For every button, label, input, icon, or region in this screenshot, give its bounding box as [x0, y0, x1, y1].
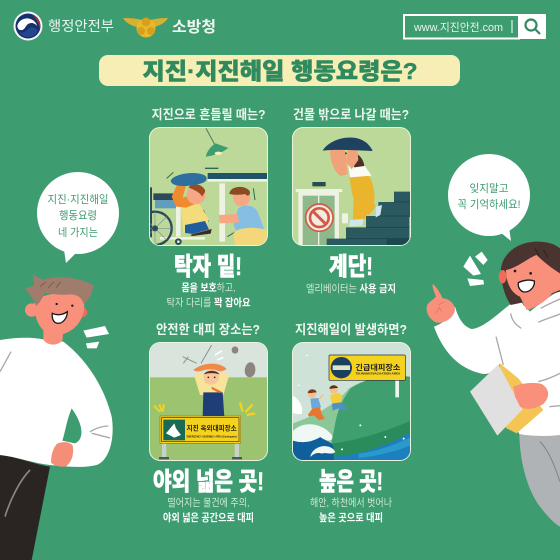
illustration: open field [148, 342, 270, 461]
icon: emphasis marks near woman [463, 252, 488, 286]
search box [404, 14, 546, 39]
agency name: 소방청 [172, 18, 216, 36]
panel: leaving the building [292, 107, 411, 295]
bubble text: 지진·지진해일 [48, 192, 108, 206]
panel: shaking [138, 107, 268, 309]
sign subtitle: EMERGENCY ASSEMBLY AREA (Earthquake) [187, 435, 237, 439]
description line two: 야외 넓은 공간으로 대피 [163, 511, 254, 524]
sign subtitle: TSUNAMI EVACUATION AREA [355, 372, 401, 376]
panel: tsunami [292, 322, 412, 524]
description: 해안, 하천에서 벗어나 [310, 496, 392, 509]
sign text: 긴급대피장소 [355, 362, 400, 372]
panel heading: 건물 밖으로 나갈 때는? [293, 107, 409, 122]
illustration: tsunami and high ground [292, 342, 412, 462]
bubble text: 잊지말고 [470, 182, 508, 195]
bubble text line two: 꼭 기억하세요! [458, 197, 520, 211]
panel heading: 지진으로 흔들릴 때는? [152, 107, 266, 122]
website address: www.지진안전.com [413, 21, 503, 34]
action headline: 탁자 밑! [174, 253, 242, 281]
title [99, 55, 460, 86]
description: 엘리베이터는 사용 금지 [306, 282, 396, 295]
character: woman [427, 242, 560, 527]
panel: safe evacuation place [148, 322, 270, 524]
ministry name: 행정안전부 [48, 18, 114, 34]
bubble text line three: 네 가지는 [58, 226, 98, 239]
character: man [0, 274, 113, 560]
speech bubble: left [37, 172, 119, 263]
description line two: 높은 곳으로 대피 [319, 511, 383, 524]
panel heading: 안전한 대피 장소는? [156, 322, 260, 337]
logo: ministry of interior and safety [14, 12, 114, 40]
description: 몸을 보호하고, [182, 281, 236, 294]
sign text: 지진 옥외대피장소 [187, 424, 237, 433]
illustration: under the table [138, 127, 268, 246]
icon: magnifier [526, 20, 540, 34]
title: 지진·지진해일 행동요령은? [142, 58, 418, 84]
illustration: stairs [292, 127, 411, 247]
description line two: 탁자 다리를 꽉 잡아요 [166, 297, 251, 309]
description: 떨어지는 물건에 주의, [168, 497, 250, 509]
speech bubble: right [448, 154, 530, 241]
bubble text line two: 행동요령 [59, 209, 97, 222]
icon: emphasis marks near man [83, 326, 109, 348]
action headline: 야외 넓은 곳! [153, 468, 264, 496]
action headline: 높은 곳! [319, 468, 383, 496]
logo: national fire agency [123, 18, 216, 38]
panel heading: 지진해일이 발생하면? [295, 322, 407, 337]
action headline: 계단! [329, 253, 373, 281]
